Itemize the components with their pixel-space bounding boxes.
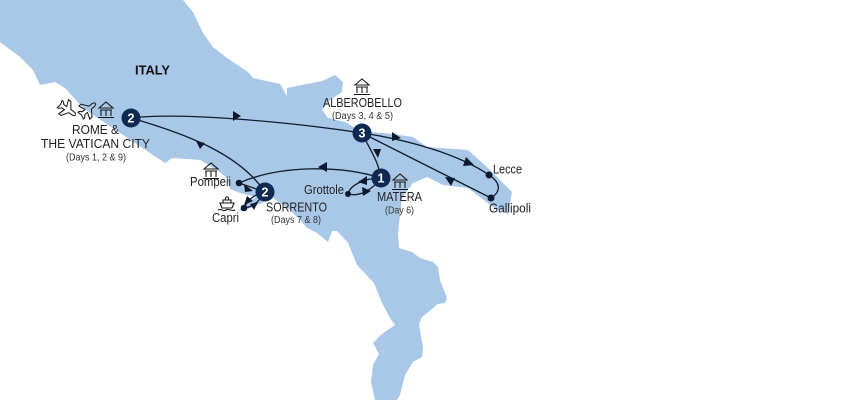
label: Alberobello: ALBEROBELLO	[323, 95, 402, 110]
icon: temple, Matera	[392, 174, 408, 190]
marker: Sorrento 2 nights	[256, 182, 274, 202]
country label: Italy: ITALY	[135, 62, 170, 78]
label: Sorrento	[266, 200, 327, 226]
marker: Alberobello 3 nights: 3	[359, 126, 366, 140]
label: Alberobello: (Days 3, 4 & 5)	[332, 111, 393, 122]
marker: Matera 1 night: 1	[378, 172, 385, 186]
label: Rome and the Vatican City	[41, 122, 150, 164]
label: Matera	[377, 189, 422, 216]
label: Capri: Capri	[212, 210, 239, 225]
label: Matera: (Day 6)	[385, 206, 414, 216]
label: Alberobello	[323, 95, 402, 122]
icon: temple, Rome	[98, 102, 114, 118]
icon: plane departing	[55, 97, 80, 122]
marker: Sorrento 2 nights: 2	[262, 186, 269, 200]
label: Gallipoli: Gallipoli	[489, 200, 531, 216]
marker: Alberobello 3 nights	[352, 124, 372, 142]
route lines	[131, 116, 498, 208]
label: Rome and the Vatican City: (Days 1, 2 & 9)	[66, 152, 126, 164]
icon: plane arriving	[75, 97, 101, 122]
landmass: Italy	[0, 0, 512, 400]
label: Sorrento: SORRENTO	[266, 200, 327, 214]
marker: Matera 1 night	[372, 168, 390, 188]
label: Pompeii: Pompeii	[190, 174, 231, 189]
marker: Rome 2 nights: 2	[128, 112, 135, 126]
label: Sorrento: (Days 7 & 8)	[271, 215, 321, 226]
icon: temple, Alberobello	[354, 79, 370, 94]
icon: temple, Pompeii	[203, 163, 219, 178]
label: Rome and the Vatican City: THE VATICAN CITY	[41, 136, 150, 151]
label: Rome and the Vatican City: ROME &	[72, 122, 119, 137]
route arrowheads	[196, 111, 474, 210]
label: Grottole: Grottole	[304, 182, 344, 197]
icon: ferry, Capri	[218, 197, 235, 211]
marker: Rome 2 nights	[122, 108, 140, 128]
label: Lecce: Lecce	[493, 162, 522, 176]
stop dots	[236, 172, 494, 211]
label: Matera: MATERA	[377, 189, 422, 204]
